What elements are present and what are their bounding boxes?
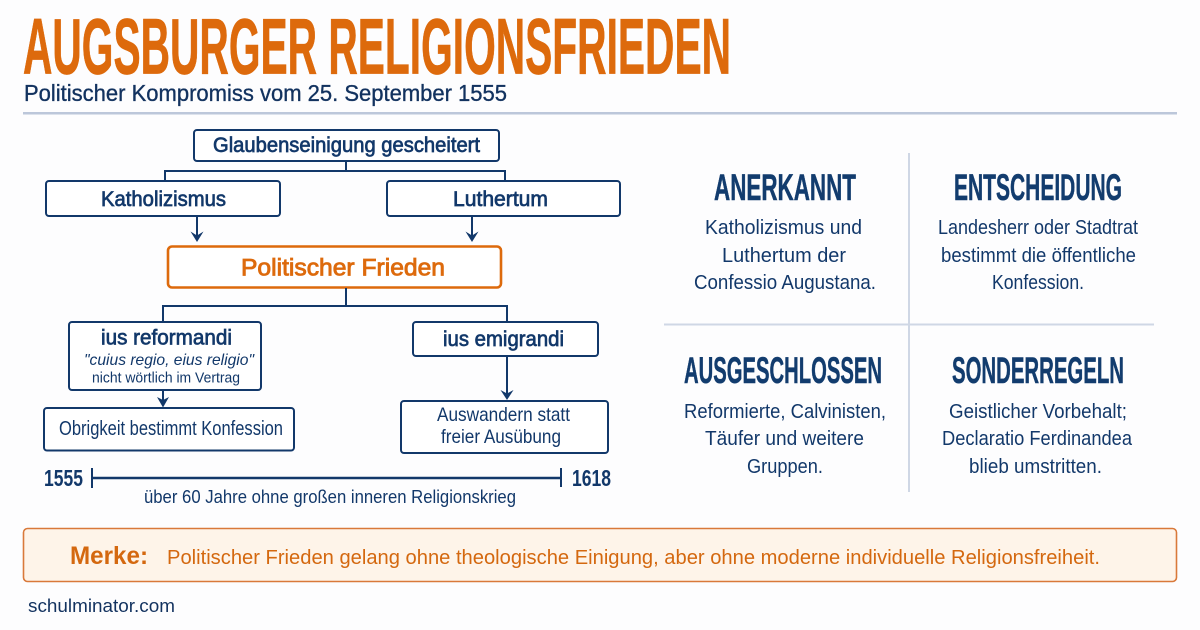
panel: Ausgeschlossen: Täufer und weitere [705, 427, 864, 450]
timeline 1555 to 1618: 1618 [572, 465, 611, 491]
panel: Ausgeschlossen: Gruppen. [747, 455, 823, 478]
panel: Ausgeschlossen: Reformierte, Calvinisten, [684, 400, 886, 423]
panel: Sonderregeln [942, 349, 1133, 478]
callout: Merke: Politischer Frieden gelang ohne theologische Einigung, aber ohne moderne individuelle Religionsfreiheit. [167, 546, 1100, 569]
panel: Sonderregeln: blieb umstritten. [969, 455, 1102, 478]
box: Obrigkeit bestimmt Konfession: Obrigkeit bestimmt Konfession [59, 418, 283, 440]
box: Glaubenseinigung gescheitert: Glaubenseinigung gescheitert [213, 133, 480, 157]
box: ius reformandi: "cuius regio, eius religio" [84, 352, 255, 369]
box: Politischer Frieden [168, 246, 501, 288]
callout: Merke: Merke: [70, 542, 148, 570]
timeline 1555 to 1618 [44, 465, 611, 507]
callout: Merke [24, 528, 1176, 582]
footer: source: schulminator.com [28, 595, 175, 616]
panel: Anerkannt: Luthertum der [722, 244, 846, 267]
panel: Anerkannt: Confessio Augustana. [694, 271, 876, 294]
box: Katholizismus [46, 181, 280, 216]
panel: Ausgeschlossen [684, 349, 886, 478]
timeline 1555 to 1618: 1555 [44, 465, 83, 491]
box: Auswandern statt freier Ausübung: freier Ausübung [441, 426, 561, 448]
dividers [908, 153, 910, 492]
box: Katholizismus: Katholizismus [101, 187, 226, 211]
arrow: Katholizismus to Frieden [190, 216, 204, 242]
box: ius reformandi: nicht wörtlich im Vertrag [92, 370, 240, 386]
arrow: Luthertum to Frieden [466, 216, 478, 242]
panel: Entscheidung: Konfession. [992, 271, 1084, 294]
box: Obrigkeit bestimmt Konfession [44, 408, 294, 450]
panel: Sonderregeln: Declaratio Ferdinandea [942, 427, 1133, 450]
box: ius reformandi: ius reformandi [101, 326, 232, 350]
box: Luthertum: Luthertum [453, 187, 548, 211]
panel: Ausgeschlossen: AUSGESCHLOSSEN [684, 349, 882, 391]
box: ius emigrandi: ius emigrandi [443, 327, 564, 351]
timeline 1555 to 1618: über 60 Jahre ohne großen inneren Religionskrieg [144, 486, 516, 507]
panel: Anerkannt [694, 166, 876, 294]
panel: Sonderregeln: Geistlicher Vorbehalt; [949, 400, 1127, 423]
box: Politischer Frieden: Politischer Frieden [241, 254, 445, 282]
box: Luthertum [387, 181, 620, 216]
panel: Entscheidung: bestimmt die öffentliche [941, 244, 1136, 267]
panel: Entscheidung: Landesherr oder Stadtrat [938, 216, 1138, 239]
arrow: ius reformandi to Obrigkeit [157, 390, 169, 408]
panel: Anerkannt: Katholizismus und [705, 216, 862, 239]
panel: Entscheidung [938, 166, 1138, 294]
subtitle: Politischer Kompromiss vom 25. September 1555 [24, 80, 507, 106]
flowchart [44, 130, 620, 453]
arrow: ius emigrandi to Auswandern [500, 356, 514, 400]
box: ius reformandi [69, 322, 261, 390]
box: Auswandern statt freier Ausübung: Auswandern statt [437, 404, 571, 426]
box: Auswandern statt freier Ausübung [401, 401, 608, 453]
box: ius emigrandi [413, 322, 598, 356]
panel: Anerkannt: ANERKANNT [714, 166, 856, 208]
